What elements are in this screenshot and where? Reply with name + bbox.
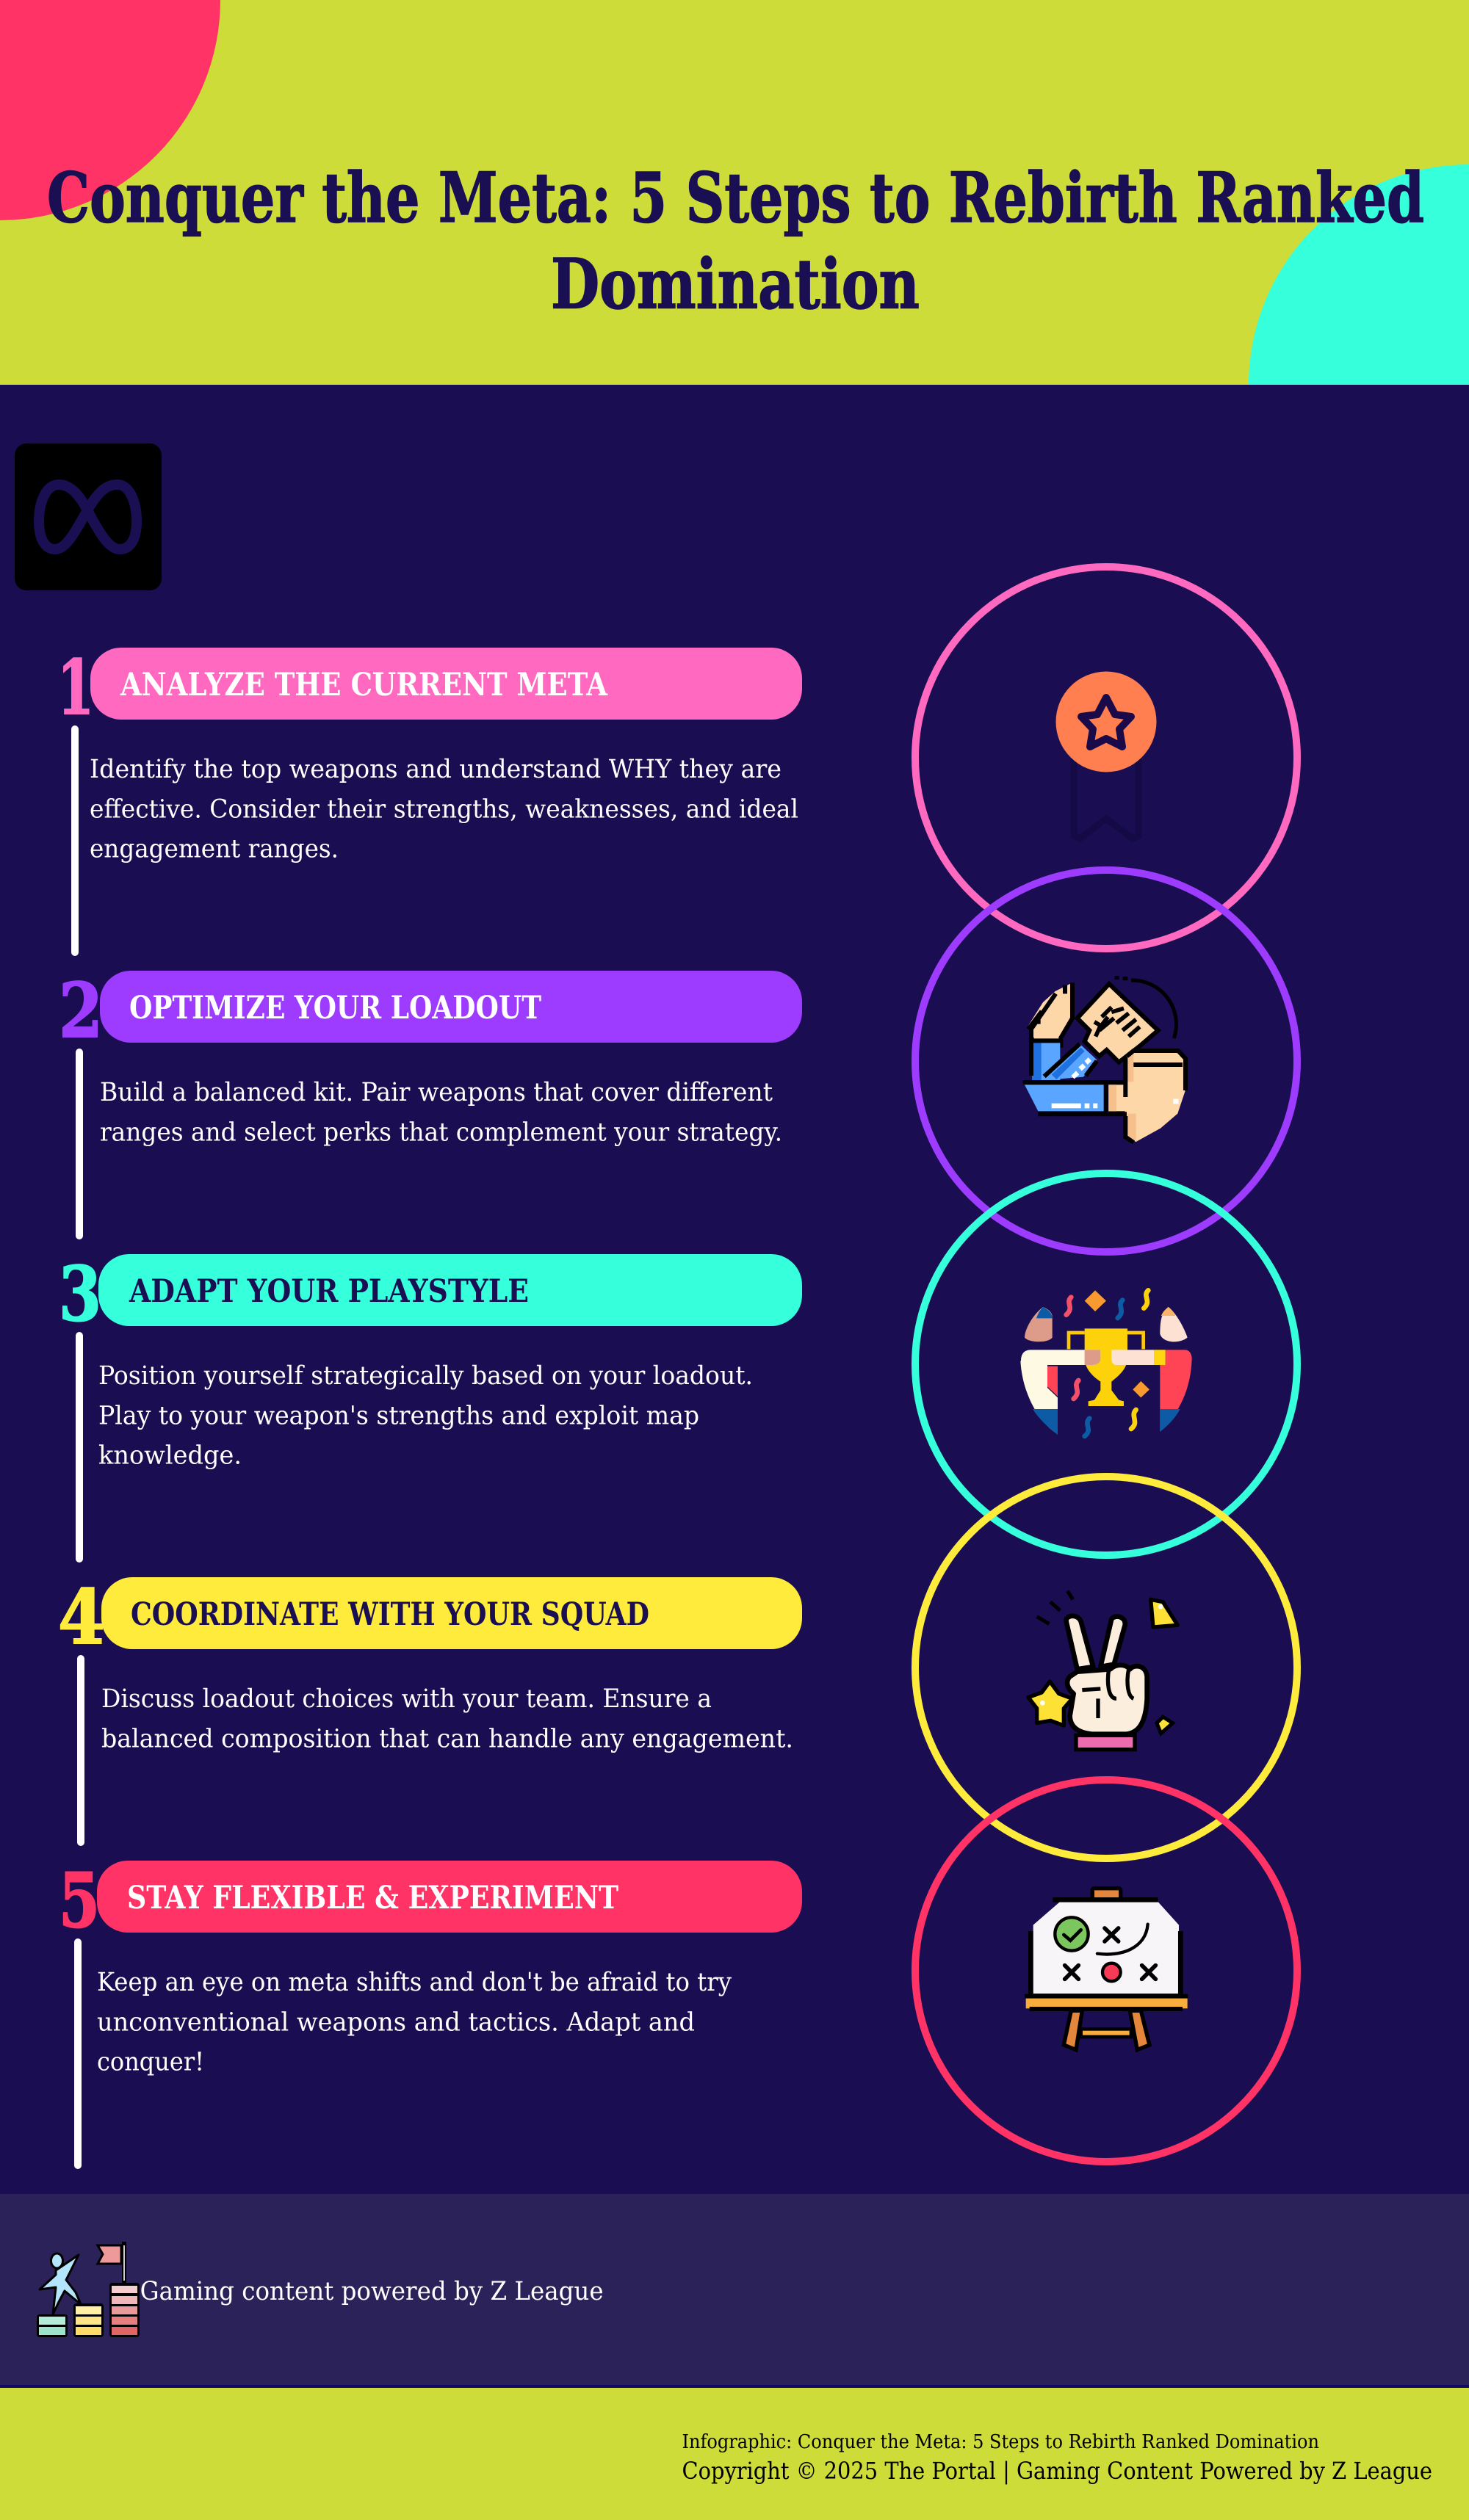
title (47, 158, 1424, 325)
step 5 number: 5 (59, 1857, 100, 1945)
step 3 body text: Position yourself strategically based on your loadout. (98, 1361, 753, 1391)
icon: climbing steps with flag (37, 2242, 140, 2337)
step 4 (58, 1574, 802, 1846)
caption line: Infographic: Conquer the Meta: 5 Steps to Rebirth Ranked Domination (682, 2431, 1319, 2453)
step 3 body text: knowledge. (98, 1441, 242, 1470)
step 4 body text: Discuss loadout choices with your team. Ensure a (101, 1684, 712, 1714)
step 4 connector (77, 1655, 84, 1846)
step 2 connector (76, 1049, 83, 1239)
step 1 body text: effective. Consider their strengths, weaknesses, and ideal (90, 794, 798, 824)
step 2 heading pill: OPTIMIZE YOUR LOADOUT (129, 990, 541, 1027)
decorative teal circle (1249, 164, 1469, 385)
step 2 body text: Build a balanced kit. Pair weapons that cover different (100, 1078, 773, 1107)
step 5 body text: unconventional weapons and tactics. Adapt and (97, 2007, 695, 2037)
step 2 number: 2 (59, 967, 103, 1055)
circle ring: step 3 (915, 1173, 1297, 1555)
step 2 (59, 967, 802, 1239)
step 4 heading pill (101, 1577, 802, 1649)
step 5 heading pill: STAY FLEXIBLE & EXPERIMENT (127, 1880, 618, 1916)
step 2 body text (100, 1078, 782, 1147)
bottom credits band (0, 2388, 1469, 2520)
step 1 heading pill: ANALYZE THE CURRENT META (120, 667, 608, 703)
step 1 number: 1 (57, 644, 94, 732)
step 2 body text: ranges and select perks that complement your strategy. (100, 1118, 782, 1147)
step 5 body text: Keep an eye on meta shifts and don't be afraid to try (97, 1968, 732, 1997)
step 3 (59, 1250, 802, 1563)
step 2 heading pill (100, 971, 802, 1043)
step 5 body text: conquer! (97, 2047, 204, 2077)
circle ring: step 1 (915, 567, 1297, 949)
icon: medal with star (1056, 671, 1156, 839)
step 1 body text: Identify the top weapons and understand WHY they are (90, 755, 782, 784)
step 4 body text: balanced composition that can handle any engagement. (101, 1724, 793, 1753)
header band (0, 0, 1469, 385)
circle ring: step 5 (915, 1780, 1297, 2162)
step 1 (57, 644, 802, 956)
icon: strategy board on easel (1025, 1889, 1188, 2050)
step 5 body text (97, 1968, 732, 2077)
circle ring: step 2 (915, 870, 1297, 1252)
footer text: Gaming content powered by Z League (140, 2277, 604, 2306)
step 3 heading pill (98, 1254, 802, 1326)
step 3 heading pill: ADAPT YOUR PLAYSTYLE (129, 1273, 529, 1310)
step 1 heading pill (90, 648, 802, 720)
step 1 connector (71, 725, 79, 956)
title: Domination (551, 244, 920, 325)
step 5 heading pill (97, 1861, 802, 1933)
step 3 body text: Play to your weapon's strengths and exploit map (98, 1401, 699, 1430)
step 3 number: 3 (59, 1250, 101, 1339)
step 5 connector (74, 1938, 82, 2169)
icon: meta logo (15, 443, 162, 590)
icon: victory hand (1028, 1591, 1177, 1750)
step 4 heading pill: COORDINATE WITH YOUR SQUAD (131, 1596, 649, 1633)
step 3 connector (76, 1332, 83, 1563)
step 4 number: 4 (58, 1574, 105, 1662)
icon: fists and arm wrestling (1023, 978, 1185, 1143)
step 5 (59, 1857, 802, 2169)
step 1 body text: engagement ranges. (90, 834, 339, 863)
circle ring: step 4 (915, 1477, 1297, 1858)
icon: trophy celebration (1020, 1290, 1192, 1436)
main dark panel (0, 385, 1469, 2194)
step 1 body text (90, 755, 798, 863)
step 3 body text (98, 1361, 753, 1470)
decorative red circle (0, 0, 220, 220)
step 4 body text (101, 1684, 793, 1753)
footer band (0, 2194, 1469, 2388)
